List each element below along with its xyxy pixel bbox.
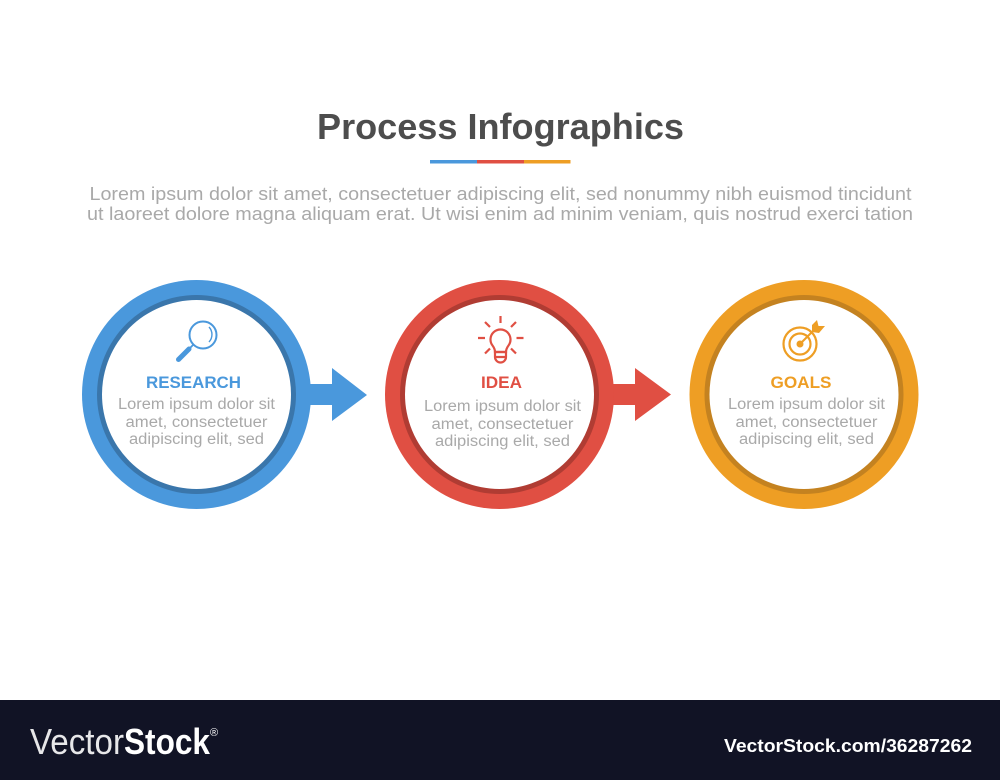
icon: magnifying glass — [178, 322, 216, 360]
footer image id: VectorStock.com/36287262 — [724, 736, 972, 756]
research text: amet, consectetuer — [126, 414, 268, 431]
goals text: adipiscing elit, sed — [739, 431, 874, 448]
arrow: research to idea — [305, 368, 367, 421]
panel: idea — [385, 280, 671, 509]
panel: goals — [690, 280, 918, 509]
icon: light bulb — [478, 316, 524, 363]
goals heading: GOALS — [770, 373, 832, 392]
footer logo: ® — [210, 727, 218, 739]
title: Process Infographics — [317, 106, 684, 147]
idea ring — [385, 280, 614, 509]
research text: adipiscing elit, sed — [129, 431, 264, 448]
idea text: Lorem ipsum dolor sit — [424, 398, 582, 415]
intro text: Lorem ipsum dolor sit amet, consectetuer adipiscing elit, sed nonummy nibh euismod tincidunt — [90, 184, 912, 204]
icon: target — [784, 320, 825, 360]
research text: Lorem ipsum dolor sit — [118, 396, 276, 413]
idea heading: IDEA — [481, 373, 522, 392]
goals text: Lorem ipsum dolor sit — [728, 396, 886, 413]
title underline — [430, 160, 570, 164]
footer logo: Vector — [30, 721, 124, 762]
idea text: adipiscing elit, sed — [435, 433, 570, 450]
footer logo: Stock — [124, 721, 211, 762]
research heading: RESEARCH — [146, 373, 241, 392]
research ring — [82, 280, 311, 509]
intro text: ut laoreet dolore magna aliquam erat. Ut wisi enim ad minim veniam, quis nostrud exerci tation — [87, 204, 913, 224]
panel: research — [82, 280, 367, 509]
footer bar — [0, 700, 1000, 780]
idea text — [424, 398, 582, 450]
goals ring — [690, 280, 918, 509]
goals text: amet, consectetuer — [736, 414, 878, 431]
idea text: amet, consectetuer — [432, 416, 574, 433]
research text — [118, 396, 276, 448]
intro text — [87, 184, 913, 224]
arrow: idea to goals — [608, 368, 671, 421]
footer logo — [30, 721, 218, 762]
goals text — [728, 396, 886, 448]
